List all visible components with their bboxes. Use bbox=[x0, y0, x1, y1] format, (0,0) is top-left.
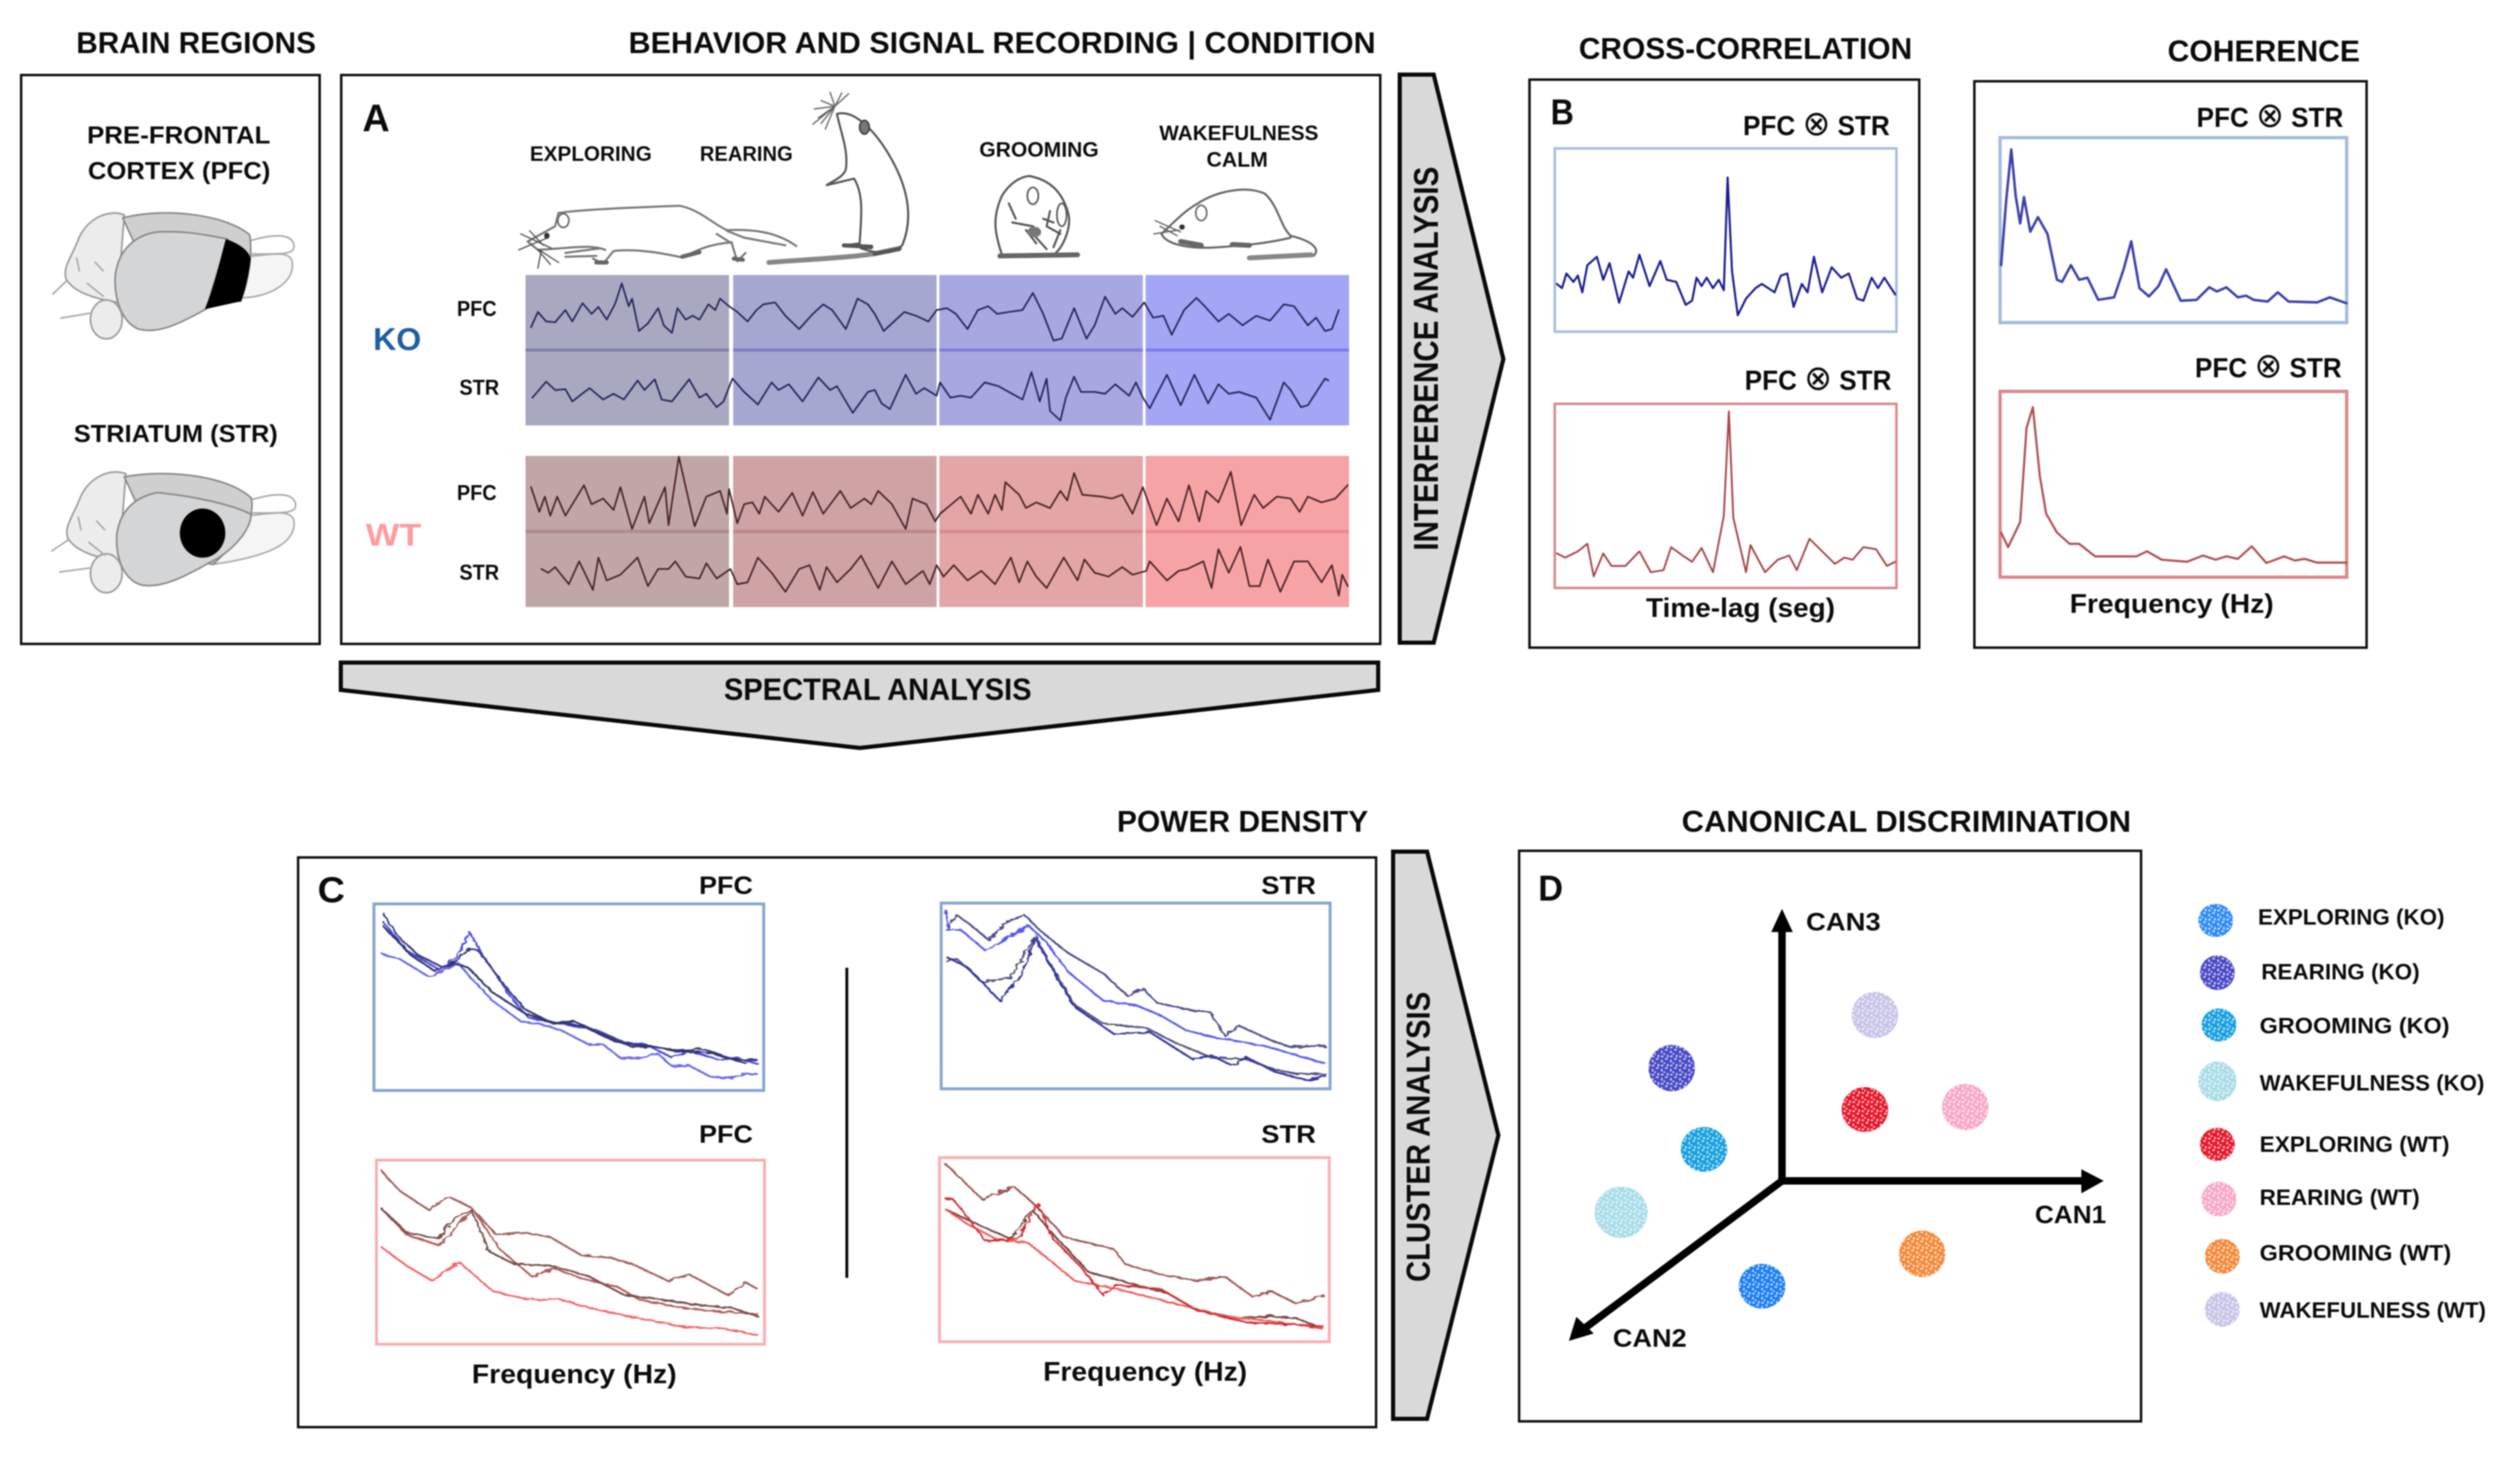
panel: brain regions bbox=[22, 75, 320, 644]
label: rearing: REARING bbox=[700, 143, 793, 166]
legend: grooming KO bbox=[2202, 1008, 2450, 1042]
icon: grooming rat bbox=[995, 176, 1077, 256]
legend: wakefulness WT: WAKEFULNESS (WT) bbox=[2260, 1298, 2486, 1323]
chart: KO cross-correlation bbox=[1555, 148, 1896, 332]
heading: power density: POWER DENSITY bbox=[1117, 804, 1368, 838]
chart: KO signal traces bbox=[526, 275, 1349, 425]
arrow: interference analysis bbox=[1400, 75, 1503, 643]
label: PFC x STR, KO: PFC ⊗ STR bbox=[2197, 95, 2343, 134]
icon: rearing rat bbox=[769, 92, 908, 262]
axis label: frequency: Frequency (Hz) bbox=[2070, 589, 2274, 619]
panel C: power density bbox=[299, 857, 1377, 1427]
panel A: behavior and signal recording bbox=[342, 75, 1380, 644]
label: wakefulness calm: CALM bbox=[1207, 148, 1268, 172]
legend: exploring KO: EXPLORING (KO) bbox=[2258, 905, 2445, 930]
divider between PFC and STR bbox=[846, 968, 848, 1278]
label: PFC x STR, KO: PFC ⊗ STR bbox=[1743, 104, 1890, 143]
panel: coherence bbox=[1974, 81, 2367, 648]
legend: exploring WT: EXPLORING (WT) bbox=[2260, 1132, 2450, 1157]
label: striatum: STRIATUM (STR) bbox=[74, 420, 278, 448]
chart: WT coherence bbox=[2000, 391, 2347, 577]
chart: STR power KO bbox=[941, 903, 1330, 1089]
arrow: spectral analysis bbox=[341, 663, 1378, 748]
axis label: CAN3: CAN3 bbox=[1806, 907, 1881, 936]
label: PFC KO: PFC bbox=[699, 871, 753, 900]
chart: PFC power KO bbox=[374, 904, 764, 1090]
heading: brain regions: BRAIN REGIONS bbox=[76, 26, 316, 60]
heading: cross-correlation: CROSS-CORRELATION bbox=[1579, 32, 1912, 66]
legend bbox=[2198, 904, 2486, 1327]
panel letter C: C bbox=[318, 870, 345, 911]
icon: exploring rat bbox=[518, 206, 796, 268]
label: STR WT: STR bbox=[1261, 1119, 1316, 1149]
label: grooming: GROOMING bbox=[979, 138, 1099, 162]
heading: canonical discrimination: CANONICAL DISCRIMINATION bbox=[1682, 804, 2131, 838]
panel letter D: D bbox=[1538, 868, 1563, 909]
panel letter A: A bbox=[362, 96, 390, 139]
chart: PFC power WT bbox=[376, 1160, 765, 1344]
legend: rearing WT: REARING (WT) bbox=[2260, 1185, 2420, 1210]
label: pre-frontal cortex: PRE-FRONTAL bbox=[87, 122, 270, 149]
label: wakefulness calm bbox=[1159, 122, 1318, 172]
label: pre-frontal cortex bbox=[87, 122, 270, 185]
axis label: time-lag: Time-lag (seg) bbox=[1646, 593, 1835, 623]
label: KO PFC: PFC bbox=[457, 296, 497, 321]
axis label: CAN1: CAN1 bbox=[2035, 1200, 2106, 1229]
label: PFC WT: PFC bbox=[699, 1119, 753, 1149]
legend: wakefulness WT bbox=[2205, 1292, 2486, 1327]
label: pre-frontal cortex: CORTEX (PFC) bbox=[88, 158, 270, 185]
legend: grooming KO: GROOMING (KO) bbox=[2260, 1013, 2450, 1038]
legend: rearing KO: REARING (KO) bbox=[2261, 959, 2420, 984]
chart: KO coherence bbox=[2000, 138, 2347, 323]
chart: STR power WT bbox=[940, 1158, 1329, 1342]
label: STR KO: STR bbox=[1261, 871, 1316, 900]
panel letter B: B bbox=[1551, 92, 1574, 133]
label: KO: KO bbox=[373, 323, 421, 357]
heading: coherence: COHERENCE bbox=[2168, 34, 2360, 68]
legend: exploring KO bbox=[2198, 904, 2445, 937]
chart: WT cross-correlation bbox=[1555, 404, 1896, 588]
arrow: spectral analysis: SPECTRAL ANALYSIS bbox=[724, 673, 1032, 707]
arrow: cluster analysis bbox=[1393, 852, 1498, 1419]
legend: wakefulness KO: WAKEFULNESS (KO) bbox=[2260, 1071, 2484, 1095]
icon: calm rat bbox=[1153, 190, 1316, 258]
legend: grooming WT: GROOMING (WT) bbox=[2260, 1241, 2451, 1265]
heading: behavior and signal recording: BEHAVIOR AND SIGNAL RECORDING | CONDITION bbox=[629, 26, 1376, 61]
label: WT: WT bbox=[366, 518, 421, 553]
legend: grooming WT bbox=[2205, 1239, 2451, 1274]
label: WT STR: STR bbox=[459, 560, 499, 585]
chart: WT signal traces bbox=[526, 456, 1349, 607]
arrow: cluster analysis: CLUSTER ANALYSIS bbox=[1401, 992, 1437, 1282]
axis label: frequency left: Frequency (Hz) bbox=[472, 1359, 677, 1389]
label: WT PFC: PFC bbox=[457, 480, 497, 505]
legend: rearing KO bbox=[2200, 955, 2420, 990]
axes bbox=[1569, 909, 2104, 1341]
arrow: interference analysis: INTERFERENCE ANALYSIS bbox=[1406, 167, 1445, 551]
legend: exploring WT bbox=[2200, 1128, 2450, 1161]
clusters bbox=[1595, 992, 1988, 1309]
icon: brain with striatum highlighted bbox=[52, 472, 296, 593]
axis label: CAN2: CAN2 bbox=[1613, 1323, 1687, 1353]
label: exploring: EXPLORING bbox=[530, 143, 652, 166]
panel B: cross-correlation bbox=[1529, 80, 1919, 648]
panel D: canonical discrimination bbox=[1519, 851, 2141, 1421]
legend: wakefulness KO bbox=[2198, 1061, 2484, 1101]
legend: rearing WT bbox=[2202, 1182, 2420, 1217]
label: wakefulness calm: WAKEFULNESS bbox=[1159, 122, 1318, 145]
label: KO STR: STR bbox=[459, 375, 499, 400]
icon: brain with prefrontal region highlighted bbox=[53, 213, 294, 339]
axis label: frequency right: Frequency (Hz) bbox=[1043, 1357, 1247, 1387]
label: PFC x STR, WT: PFC ⊗ STR bbox=[1745, 358, 1891, 397]
label: PFC x STR, WT: PFC ⊗ STR bbox=[2195, 346, 2342, 385]
